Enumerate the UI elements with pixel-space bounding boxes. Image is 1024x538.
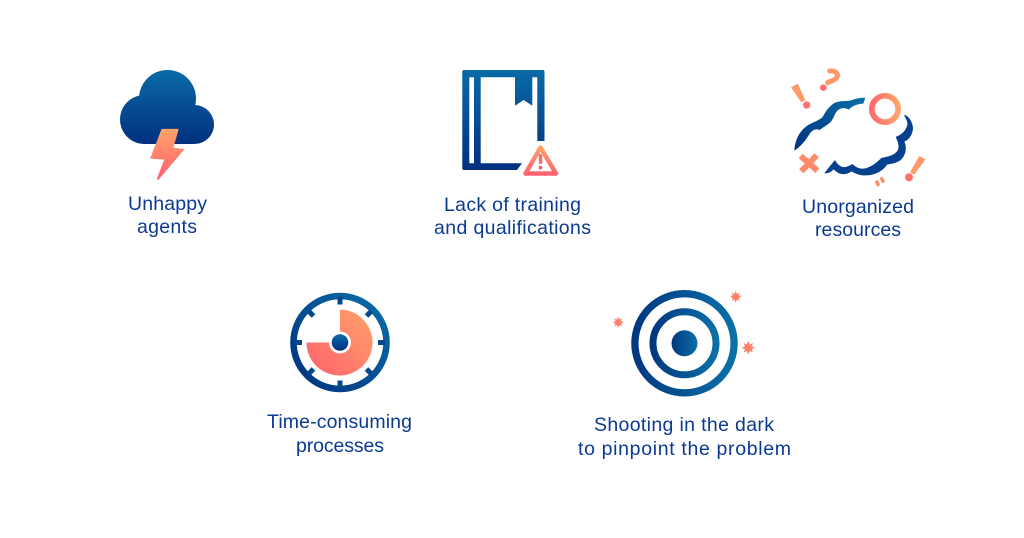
icon: messy cloud with symbols — [791, 71, 925, 186]
icon: stopwatch dial — [294, 296, 386, 389]
label: unorganized resources: Unorganized — [802, 196, 914, 218]
icon: storm cloud with lightning — [120, 70, 214, 179]
panel: shooting in the dark — [578, 291, 791, 460]
panel: unhappy agents — [120, 70, 214, 238]
label: unhappy agents: agents — [137, 216, 197, 238]
label: unorganized resources: resources — [815, 219, 901, 241]
label: lack of training: Lack of training — [444, 194, 581, 216]
label: time-consuming processes: processes — [296, 435, 384, 457]
label: unhappy agents: Unhappy — [128, 193, 207, 215]
label: unorganized resources — [802, 196, 914, 241]
label: shooting in the dark: to pinpoint the problem — [578, 438, 791, 460]
label: time-consuming processes — [267, 411, 412, 457]
panel: lack of training — [434, 70, 591, 239]
label: shooting in the dark — [578, 414, 791, 460]
panel: unorganized resources — [791, 71, 925, 241]
panel: time-consuming processes — [267, 296, 412, 457]
label: unhappy agents — [128, 193, 207, 238]
icon: target with sparks — [613, 291, 755, 393]
label: lack of training: and qualifications — [434, 217, 591, 239]
label: time-consuming processes: Time-consuming — [267, 411, 412, 433]
label: lack of training — [434, 194, 591, 239]
label: shooting in the dark: Shooting in the dark — [594, 414, 774, 436]
icon: book with warning sign — [462, 70, 556, 174]
